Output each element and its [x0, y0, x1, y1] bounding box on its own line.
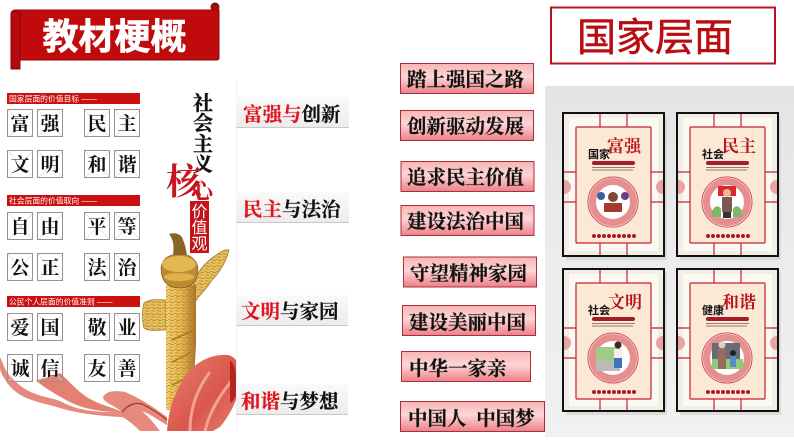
- cell grid: 爱国敬业诚信友善: 爱: [9, 317, 30, 339]
- vertical title: 社会主义核心价值观: 社: [193, 92, 213, 115]
- poster: 社会文明: 社会: [588, 303, 610, 317]
- values section 1: national: [7, 93, 140, 178]
- cell grid: 富强民主文明和谐: 和: [87, 154, 107, 176]
- vertical title: 社会主义核心价值观: 价: [191, 204, 208, 221]
- cell grid: 自由平等公正法治: 自: [10, 216, 30, 238]
- poster: 社会文明: [563, 269, 667, 415]
- ribbon: large drape: [167, 355, 236, 431]
- values section 2: social: [7, 195, 140, 281]
- cell grid: 自由平等公正法治: 正: [40, 257, 60, 279]
- vertical title: 社会主义核心价值观: 核: [166, 162, 205, 202]
- poster: 社会民主: [677, 113, 781, 260]
- bar: national heading: 国家层面的价值目标 ——: [9, 94, 97, 104]
- right tag: 追求民主价值: 追求民主价值: [407, 167, 525, 189]
- vertical title: 社会主义核心价值观: 值: [191, 219, 208, 237]
- poster: 社会民主: 民主: [722, 137, 756, 156]
- poster: 社会民主: 社会: [702, 147, 724, 161]
- cell grid: 自由平等公正法治: 平: [87, 216, 107, 238]
- right tag: 中国人 中国梦: 中国人 中国梦: [408, 408, 535, 430]
- vertical title: 社会主义核心价值观: 义: [193, 154, 213, 176]
- right tag: 创新驱动发展: 创新驱动发展: [407, 115, 525, 138]
- right tag: 建设法治中国: [401, 206, 534, 236]
- heading: 国家层面: 国家层面: [577, 17, 733, 60]
- cell grid: 爱国敬业诚信友善: 友: [87, 358, 107, 380]
- right tag: 踏上强国之路: 踏上强国之路: [407, 68, 525, 91]
- ribbon: red silk: [0, 357, 167, 431]
- values section 3: personal: [7, 296, 140, 382]
- cell grid: 富强民主文明和谐: 富: [10, 112, 30, 135]
- cell grid: 自由平等公正法治: [8, 212, 140, 281]
- title banner: 教材梗概: [11, 2, 220, 69]
- cell grid: 富强民主文明和谐: [8, 110, 140, 178]
- cell grid: 富强民主文明和谐: 谐: [117, 154, 137, 176]
- left label: 富强与创新: [236, 97, 349, 128]
- right tag: 创新驱动发展: [400, 110, 534, 140]
- cell grid: 自由平等公正法治: 治: [117, 257, 138, 279]
- cell grid: 自由平等公正法治: 由: [40, 216, 60, 238]
- cell grid: 富强民主文明和谐: 民: [87, 113, 107, 135]
- cell grid: 爱国敬业诚信友善: 善: [117, 358, 137, 380]
- poster: 健康和谐: 健康: [702, 303, 724, 317]
- poster: 国家富强: 富强: [607, 136, 643, 156]
- right tag: 建设美丽中国: [402, 306, 536, 336]
- right tag: 踏上强国之路: [400, 64, 534, 94]
- vertical title: 社会主义核心价值观: 会: [193, 112, 213, 135]
- cell grid: 爱国敬业诚信友善: 信: [40, 358, 60, 380]
- poster: 健康和谐: [677, 269, 781, 415]
- cell grid: 自由平等公正法治: 等: [117, 216, 137, 238]
- panel: poster wall: [545, 86, 794, 437]
- poster: 国家富强: [563, 113, 667, 260]
- left label: 民主与法治: [236, 192, 349, 223]
- cell grid: 爱国敬业诚信友善: 国: [40, 317, 60, 339]
- bar: personal heading: 公民个人层面的价值准则 ——: [9, 296, 113, 306]
- title banner: 教材梗概: 教材梗概: [42, 16, 187, 57]
- cell grid: 富强民主文明和谐: 主: [117, 113, 137, 135]
- right tag: 中华一家亲: 中华一家亲: [409, 357, 507, 380]
- poster: 国家富强: 国家: [588, 147, 610, 161]
- right tag: 中国人 中国梦: [400, 402, 544, 432]
- cell grid: 爱国敬业诚信友善: 敬: [87, 317, 107, 339]
- left label: 和谐与梦想: 和谐与梦想: [241, 391, 340, 413]
- right tag: 中华一家亲: [402, 352, 530, 382]
- bar: social heading: 社会层面的价值取向 ——: [9, 196, 97, 206]
- vertical title: 社会主义核心价值观: 心: [191, 179, 216, 204]
- heading: 国家层面: [551, 8, 775, 64]
- vertical title: 社会主义核心价值观: 观: [191, 236, 208, 253]
- right tag: 建设法治中国: 建设法治中国: [407, 211, 524, 233]
- left label: 和谐与梦想: [236, 384, 348, 415]
- right tag: 追求民主价值: [401, 162, 534, 192]
- vertical title: 社会主义核心价值观: 主: [193, 133, 213, 156]
- poster: 健康和谐: 和谐: [722, 293, 756, 312]
- right tag: 守望精神家园: [404, 257, 536, 287]
- poster: 社会文明: 文明: [608, 293, 642, 312]
- vertical title: 社会主义核心价值观: [166, 92, 216, 253]
- fragment: dark red ribbon edge: [230, 360, 236, 403]
- right tag: 建设美丽中国: 建设美丽中国: [409, 311, 526, 334]
- left label: 富强与创新: 富强与创新: [243, 103, 341, 126]
- cell grid: 自由平等公正法治: 公: [10, 258, 30, 279]
- right tag: 守望精神家园: 守望精神家园: [410, 262, 527, 285]
- cell grid: 富强民主文明和谐: 明: [40, 154, 60, 176]
- cell grid: 爱国敬业诚信友善: [8, 314, 140, 382]
- cell grid: 爱国敬业诚信友善: 诚: [10, 358, 30, 380]
- left label: 文明与家园: [236, 295, 348, 326]
- cell grid: 自由平等公正法治: 法: [87, 257, 108, 279]
- cell grid: 爱国敬业诚信友善: 业: [117, 317, 137, 339]
- left label: 文明与家园: 文明与家园: [241, 300, 339, 323]
- huabiao column: [142, 233, 229, 410]
- panel: core values background edge: [236, 80, 237, 431]
- cell grid: 富强民主文明和谐: 文: [10, 154, 30, 176]
- cell grid: 富强民主文明和谐: 强: [40, 113, 61, 135]
- left label: 民主与法治: 民主与法治: [243, 199, 342, 221]
